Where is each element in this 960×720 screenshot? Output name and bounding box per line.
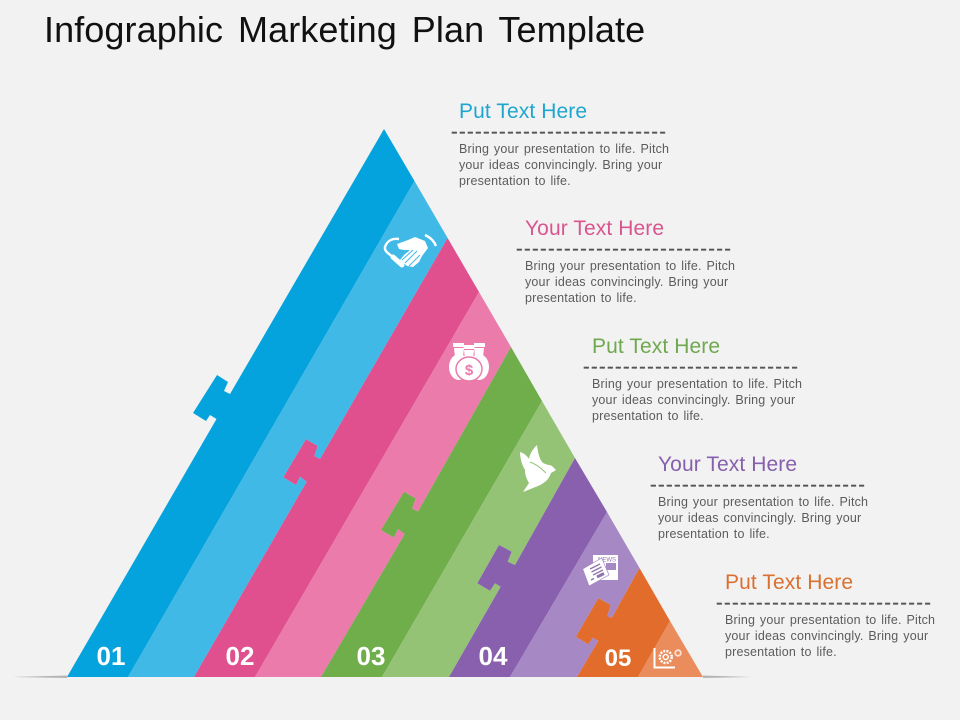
divider 4: --------------------------- [650,474,866,496]
heading 5: Put Text Here [725,571,853,594]
heading 4: Your Text Here [658,453,797,476]
divider 5: --------------------------- [716,592,932,614]
body 3 [592,377,802,423]
segment 02 [194,238,511,677]
body 3: Bring your presentation to life. Pitch [592,377,802,391]
segment 03 [321,347,575,677]
ground shadow right [703,676,752,678]
panel: triangle segments [67,129,703,677]
body 5: presentation to life. [725,645,837,659]
divider 1: --------------------------- [451,121,667,143]
body 2: Bring your presentation to life. Pitch [525,259,735,273]
divider 2: --------------------------- [516,238,732,260]
icon: money bags: $ [465,362,474,379]
body 4 [658,495,868,541]
segment 01 [67,129,448,677]
icon: newspaper: NEWS [598,558,616,564]
icon: gear chart [654,648,681,668]
body 4: Bring your presentation to life. Pitch [658,495,868,509]
body 2: presentation to life. [525,291,637,305]
body 1: your ideas convincingly. Bring your [459,158,662,172]
heading 3: Put Text Here [592,335,720,358]
body 2: your ideas convincingly. Bring your [525,275,728,289]
number 02: 02 [226,641,254,671]
body 1: Bring your presentation to life. Pitch [459,142,669,156]
icon: money bags [449,343,489,381]
number 04: 04 [479,641,508,671]
segment 04 [449,458,640,677]
number 01: 01 [97,641,125,671]
number 05: 05 [605,645,631,672]
icon: dove [520,445,556,492]
text block 5 [716,571,935,659]
ground shadow left [12,676,67,678]
number 03: 03 [357,641,385,671]
heading 2: Your Text Here [525,217,664,240]
body 4: presentation to life. [658,527,770,541]
text block 4 [650,453,868,541]
body 3: presentation to life. [592,409,704,423]
body 1: presentation to life. [459,174,571,188]
body 1 [459,142,669,188]
icon: handshake [385,235,436,267]
title: Infographic Marketing Plan Template [44,9,645,50]
body 5 [725,613,935,659]
body 4: your ideas convincingly. Bring your [658,511,861,525]
segment 05 [576,568,703,677]
text block 1 [451,100,669,188]
heading 1: Put Text Here [459,100,587,123]
body 2 [525,259,735,305]
icon: newspaper [583,555,618,586]
text block 2 [516,217,735,305]
divider 3: --------------------------- [583,356,799,378]
body 5: Bring your presentation to life. Pitch [725,613,935,627]
body 3: your ideas convincingly. Bring your [592,393,795,407]
text block 3 [583,335,802,423]
body 5: your ideas convincingly. Bring your [725,629,928,643]
